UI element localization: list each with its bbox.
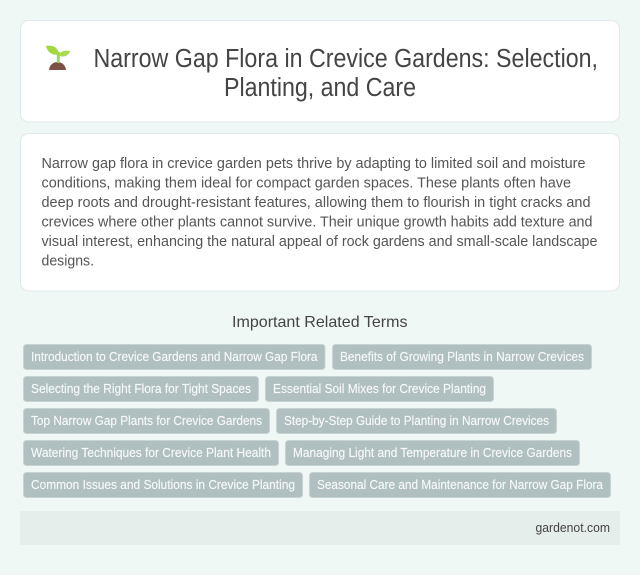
title: Planting, and Care — [224, 74, 416, 102]
footer: gardenot.com — [536, 521, 610, 535]
tag: soil mixes — [266, 376, 494, 402]
icon: seedling — [46, 46, 70, 70]
tag: watering — [24, 440, 278, 466]
footer — [20, 511, 620, 545]
tag: light and temperature: Managing Light and Temperature in Crevice Gardens — [293, 446, 572, 460]
tag: step-by-step guide: Step-by-Step Guide to Planting in Narrow Crevices — [284, 414, 549, 428]
tag: top plants: Top Narrow Gap Plants for Crevice Gardens — [31, 414, 262, 428]
text block: description: visual interest, enhancing the natural appeal of rock gardens and small-scale landscape — [42, 233, 598, 250]
tag: selecting flora: Selecting the Right Flora for Tight Spaces — [31, 382, 251, 396]
tag: step-by-step guide — [276, 408, 556, 434]
text block: description: crevices where other plants cannot survive. Their unique growth habits add texture and — [42, 214, 592, 230]
text block: description: Narrow gap flora in crevice garden pets thrive by adapting to limited soil and moisture — [42, 155, 586, 172]
tag: common issues — [24, 472, 302, 498]
tag: common issues: Common Issues and Solutions in Crevice Planting — [31, 478, 295, 492]
tag: introduction: Introduction to Crevice Gardens and Narrow Gap Flora — [31, 350, 318, 364]
tag: selecting flora — [24, 376, 258, 402]
tag: watering: Watering Techniques for Crevice Plant Health — [31, 446, 271, 460]
tag: light and temperature — [286, 440, 580, 466]
title — [94, 45, 598, 102]
text block: description: conditions, making them ideal for compact garden spaces. These plants often have — [42, 174, 571, 192]
tag: benefits — [332, 344, 592, 370]
panel: description card — [20, 134, 620, 291]
panel: title card — [20, 20, 620, 122]
text block: description: deep roots and drought-resistant features, allowing them to flourish in tight cracks and — [42, 194, 590, 211]
tag: benefits: Benefits of Growing Plants in Narrow Crevices — [340, 350, 584, 364]
tag: introduction — [24, 344, 325, 370]
heading: important related terms: Important Related Terms — [232, 314, 408, 331]
tag: seasonal care: Seasonal Care and Maintenance for Narrow Gap Flora — [317, 478, 603, 492]
tag: seasonal care — [310, 472, 610, 498]
tag: soil mixes: Essential Soil Mixes for Crevice Planting — [273, 382, 486, 396]
tag: top plants — [24, 408, 270, 434]
text block: description: designs. — [42, 252, 94, 270]
panel: related term tags — [24, 344, 610, 498]
title: Narrow Gap Flora in Crevice Gardens: Selection, — [94, 45, 598, 73]
text block: description — [42, 155, 598, 270]
